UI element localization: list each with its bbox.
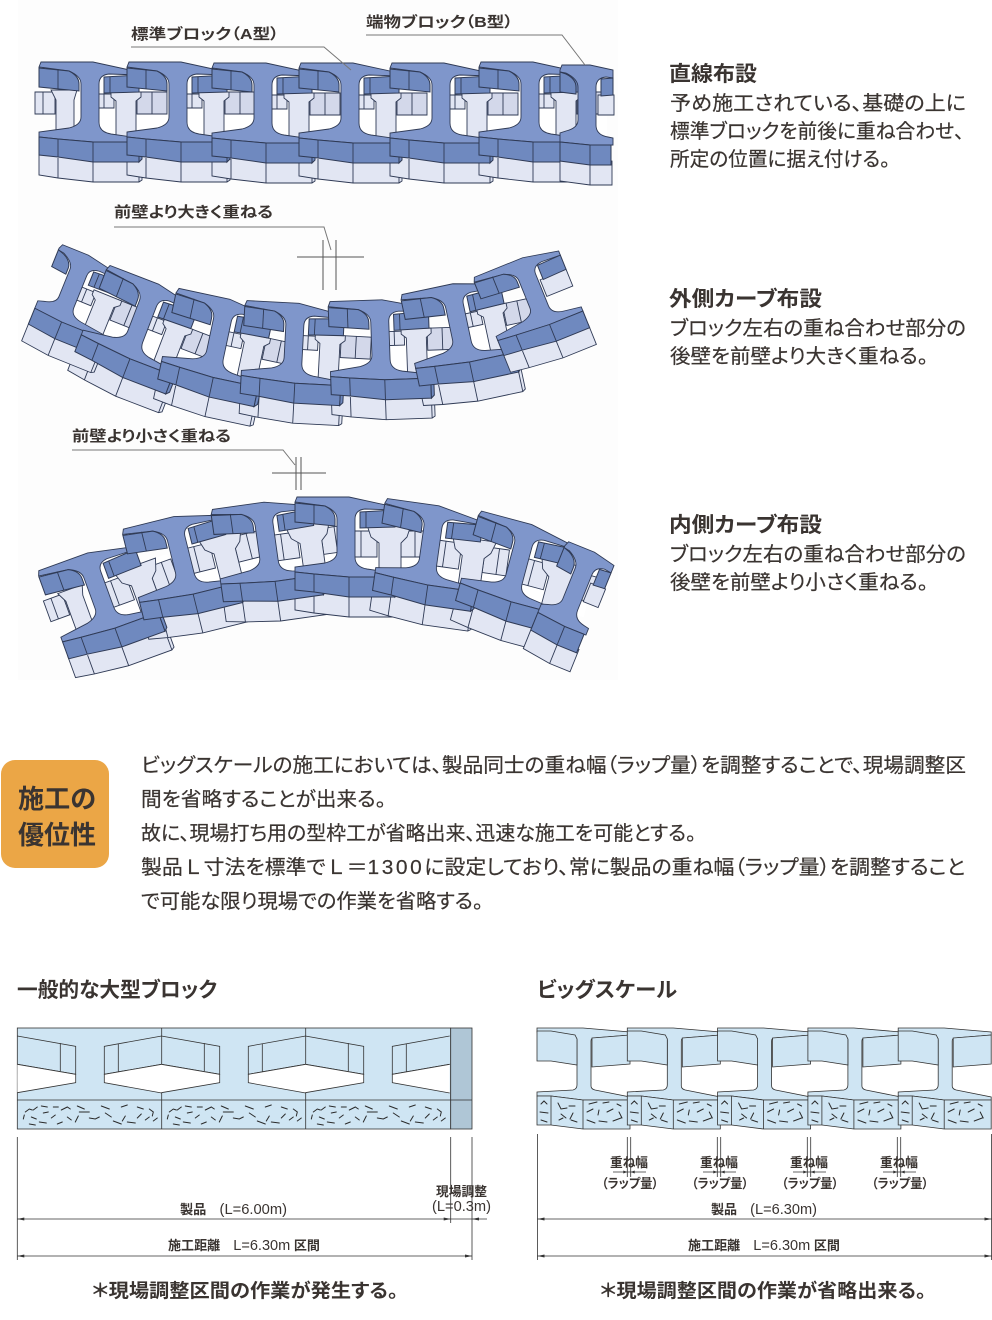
paragraph: advantages: 間を省略することが出来る。	[141, 788, 386, 811]
text block: outer curve: 後壁を前壁より大きく重ねる。	[670, 345, 928, 368]
label: end block B: 端物ブロック（B型）	[366, 13, 513, 31]
badge: construction advantages	[1, 760, 109, 868]
text block: inner curve: 内側カーブ布設	[669, 513, 822, 537]
dimensions: big scale: 製品 (L=6.30m)	[711, 1202, 817, 1218]
diagram: general large block	[17, 1028, 472, 1129]
dimensions: general block: 施工距離 L=6.30m 区間	[168, 1238, 320, 1254]
text block: straight laying	[669, 63, 966, 171]
label: overlap smaller than front wall: 前壁より小さく重ねる	[72, 427, 231, 445]
note: big scale: ＊現場調整区間の作業が省略出来る。	[600, 1279, 926, 1302]
text block: inner curve: ブロック左右の重ね合わせ部分の	[670, 542, 966, 566]
dimensions: big scale	[537, 1134, 992, 1260]
paragraph: advantages: で可能な限り現場での作業を省略する。	[141, 890, 483, 913]
paragraph: advantages: ビッグスケールの施工においては、製品同士の重ね幅（ラップ量）を調整することで、現場調整区	[141, 754, 966, 777]
text block: inner curve: 後壁を前壁より小さく重ねる。	[670, 571, 928, 594]
dimensions: general block: 現場調整	[436, 1184, 487, 1199]
text block: straight laying: 標準ブロックを前後に重ね合わせ、	[670, 119, 964, 143]
note: general block: ＊現場調整区間の作業が発生する。	[92, 1279, 398, 1302]
diagram background	[18, 0, 618, 680]
heading: big scale: ビッグスケール	[537, 978, 677, 1002]
paragraph: advantages: 故に、現場打ち用の型枠工が省略出来、迅速な施工を可能とする。	[141, 822, 696, 845]
label: standard block A	[131, 25, 351, 70]
paragraph: advantages: 製品Ｌ寸法を標準で Ｌ＝1300に設定しており、常に製品の重ね幅（ラップ量）を調整すること	[141, 856, 965, 879]
dimensions: general block: 製品 (L=6.00m)	[180, 1202, 287, 1218]
text block: inner curve	[669, 513, 966, 594]
label: overlap smaller than front wall	[72, 427, 326, 490]
dimensions: big scale: 施工距離 L=6.30m 区間	[688, 1238, 840, 1254]
dimensions: general block: (L=0.3m)	[432, 1199, 491, 1215]
diagram: outer curve laying	[20, 244, 596, 427]
text block: straight laying: 所定の位置に据え付ける。	[670, 148, 890, 171]
dimensions: general block	[17, 1137, 491, 1260]
paragraph: advantages	[141, 754, 966, 913]
label: overlap larger than front wall	[114, 203, 364, 290]
text block: straight laying: 直線布設	[669, 63, 757, 86]
label: standard block A: 標準ブロック（A型）	[131, 25, 279, 43]
text block: straight laying: 予め施工されている、基礎の上に	[670, 92, 966, 115]
text block: outer curve	[669, 287, 966, 368]
label: overlap larger than front wall: 前壁より大きく重ねる	[114, 203, 273, 221]
diagram: inner curve laying	[37, 495, 617, 684]
diagram: big scale blocks	[537, 1028, 991, 1129]
heading: general large block: 一般的な大型ブロック	[17, 978, 217, 1002]
label: end block B	[366, 13, 585, 65]
diagram: straight laying	[35, 62, 614, 185]
badge: construction advantages: 施工の	[18, 784, 96, 814]
text block: outer curve: ブロック左右の重ね合わせ部分の	[670, 316, 966, 340]
text block: outer curve: 外側カーブ布設	[669, 287, 822, 311]
badge: construction advantages: 優位性	[18, 820, 96, 850]
